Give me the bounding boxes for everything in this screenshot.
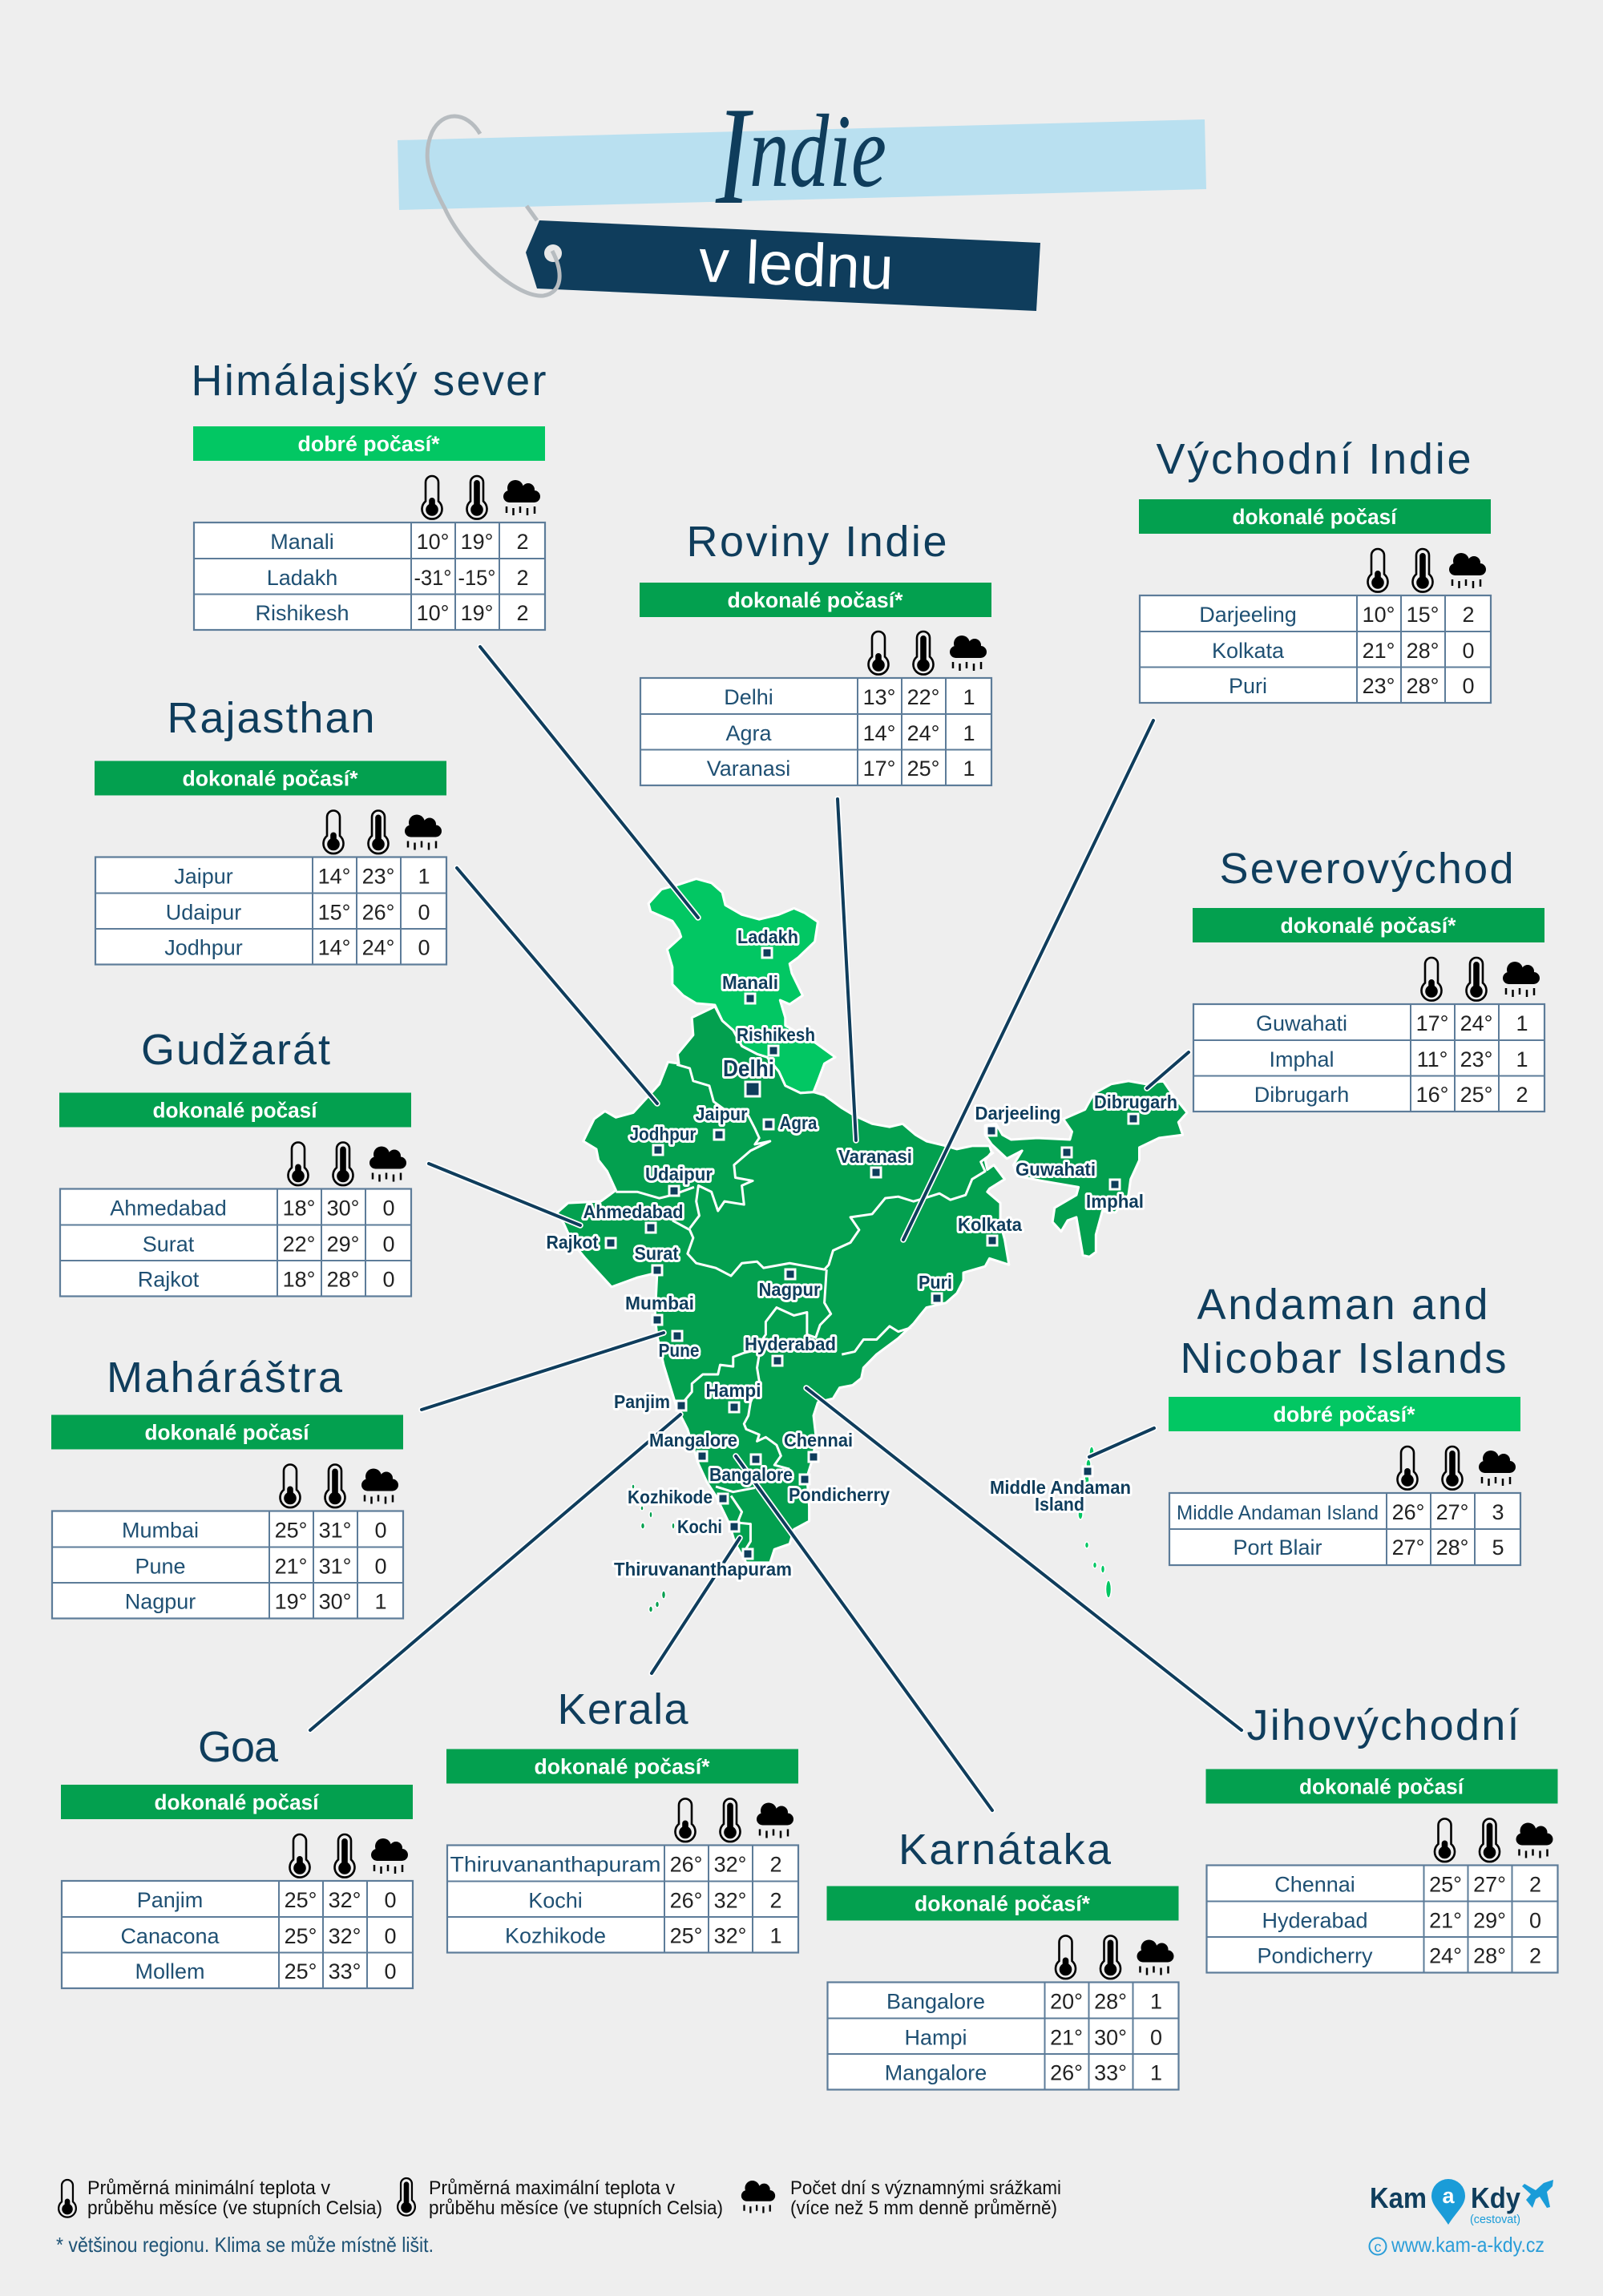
city labels	[547, 926, 1177, 1580]
data table: 5	[1492, 1535, 1504, 1560]
data table: Pune	[135, 1555, 186, 1579]
logo subline: (cestovat)	[1470, 2213, 1520, 2226]
region: Himalayan north	[648, 879, 835, 1093]
data table: 28°	[1436, 1535, 1468, 1560]
legend: minimum temperature: Průměrná minimální teplota v	[87, 2177, 330, 2199]
luggage tag	[526, 220, 1040, 311]
legend: maximum temperature: průběhu měsíce (ve stupních Celsia)	[429, 2197, 723, 2219]
weather rating bar	[193, 426, 545, 461]
line: Eastern India	[903, 720, 1153, 1240]
data table: Jaipur	[174, 864, 233, 888]
label: Kozhikode: Kozhikode	[628, 1487, 713, 1507]
data table: 2	[1516, 1083, 1528, 1107]
label: Ahmedabad: Ahmedabad	[583, 1201, 683, 1222]
weather rating bar	[1193, 908, 1544, 942]
tag string	[427, 116, 559, 296]
legend: rainy days	[741, 2177, 1061, 2219]
data table: 0	[1529, 1909, 1541, 1933]
heading: Maháráštra	[107, 1354, 343, 1402]
label: Guwahati: Guwahati	[1016, 1159, 1096, 1180]
data table: 25°	[285, 1959, 317, 1983]
icons	[1435, 1819, 1553, 1862]
weather rating bar: dokonalé počasí	[144, 1420, 310, 1444]
label: Manali: Manali	[722, 972, 778, 993]
icons	[1056, 1936, 1173, 1979]
region: main India	[557, 1007, 1009, 1563]
title text Indie: I	[715, 78, 754, 233]
data table	[1193, 1004, 1544, 1112]
label: Rajkot: Rajkot	[547, 1232, 599, 1253]
line: Southeast	[806, 1388, 1242, 1730]
label: Puri: Puri	[919, 1272, 952, 1293]
copyright and website: c	[1374, 2239, 1382, 2255]
data table: 28°	[1407, 674, 1439, 698]
data table: Panjim	[137, 1888, 203, 1912]
data table: 2	[769, 1853, 782, 1877]
region shapes	[557, 879, 1187, 1563]
panel: Eastern India	[1139, 435, 1491, 703]
data table: 2	[1462, 603, 1475, 627]
weather rating bar: dokonalé počasí*	[728, 588, 903, 612]
tag hole	[544, 244, 562, 262]
data table: 23°	[362, 864, 394, 888]
data table: 0	[382, 1196, 395, 1220]
data table: Mangalore	[885, 2061, 987, 2085]
data table: 19°	[461, 530, 493, 554]
data table: Manali	[270, 530, 334, 554]
label: Panjim: Panjim	[614, 1391, 670, 1412]
data table: Canacona	[120, 1924, 220, 1948]
line: Goa	[310, 1414, 680, 1730]
data table: 26°	[1050, 2061, 1083, 2085]
data table: Kozhikode	[505, 1923, 606, 1947]
data table: 1	[1150, 1989, 1162, 2013]
Andaman and Nicobar islands	[1078, 1447, 1111, 1598]
line: Northeast	[1147, 1052, 1189, 1088]
data table: 24°	[907, 721, 939, 745]
data table: 26°	[362, 901, 394, 925]
data table: 2	[516, 601, 529, 625]
data table: 10°	[417, 530, 449, 554]
data table: 24°	[1429, 1944, 1462, 1968]
data table: 19°	[275, 1590, 307, 1614]
data table: 25°	[1429, 1872, 1462, 1896]
data table	[640, 678, 991, 785]
data table: Nagpur	[125, 1590, 196, 1614]
data table: 2	[516, 530, 529, 554]
icon: map pin	[1431, 2179, 1465, 2225]
data table: 32°	[714, 1853, 746, 1877]
label: Mumbai: Mumbai	[625, 1293, 694, 1313]
label: Kochi: Kochi	[677, 1516, 722, 1537]
data table: Udaipur	[166, 901, 241, 925]
weather rating bar: dokonalé počasí*	[534, 1755, 710, 1779]
label: Rishikesh: Rishikesh	[737, 1024, 815, 1045]
data table: -15°	[458, 566, 495, 590]
data table: 18°	[283, 1196, 315, 1220]
data table: 26°	[670, 1888, 702, 1912]
legend: maximum temperature: Průměrná maximální teplota v	[429, 2177, 675, 2199]
label: Dibrugarh: Dibrugarh	[1094, 1092, 1177, 1112]
label: Delhi: Delhi	[723, 1056, 774, 1082]
line: Andaman	[1089, 1428, 1154, 1457]
data table	[1140, 595, 1491, 703]
legend: rainy days: (více než 5 mm denně průměrně)	[790, 2197, 1057, 2219]
heading: Rajasthan	[167, 694, 375, 742]
data table: 24°	[362, 936, 394, 960]
data table: 1	[1516, 1047, 1528, 1071]
data table: Rajkot	[138, 1268, 200, 1292]
data table: Middle Andaman Island	[1177, 1502, 1379, 1524]
data table: 25°	[285, 1924, 317, 1948]
data table: Surat	[143, 1233, 195, 1257]
line: Maharashtra	[422, 1333, 664, 1410]
icon: map pin: a	[1442, 2184, 1455, 2208]
icons	[290, 1834, 408, 1878]
weather rating bar	[446, 1749, 798, 1784]
logo: Kam a Kdy	[1369, 2179, 1553, 2257]
map of India	[557, 879, 1187, 1612]
data table: 27°	[1436, 1500, 1468, 1524]
data table: 0	[374, 1518, 387, 1542]
label: Pune: Pune	[659, 1340, 699, 1361]
label: Island: Island	[1035, 1494, 1084, 1515]
data table: Hampi	[904, 2026, 967, 2050]
subtitle v lednu: v lednu	[697, 227, 895, 303]
weather rating bar: dokonalé počasí	[152, 1098, 318, 1122]
data table: 23°	[1460, 1047, 1492, 1071]
data table: 30°	[319, 1590, 351, 1614]
data table: Kochi	[528, 1888, 583, 1912]
data table: 2	[769, 1888, 782, 1912]
data table: 30°	[1094, 2026, 1127, 2050]
data table: Dibrugarh	[1254, 1083, 1349, 1107]
weather rating bar	[827, 1886, 1178, 1920]
data table: 32°	[329, 1924, 361, 1948]
leader lines	[310, 647, 1242, 1810]
data table: 14°	[863, 721, 895, 745]
data table: Ahmedabad	[110, 1196, 227, 1220]
weather rating bar: dokonalé počasí	[1233, 505, 1398, 529]
label: Bangalore: Bangalore	[709, 1464, 793, 1485]
icons	[289, 1143, 406, 1185]
label: Hampi: Hampi	[705, 1380, 761, 1401]
region: Northeast	[985, 1081, 1187, 1257]
data table: 0	[418, 936, 430, 960]
legend: rainy days: Počet dní s významnými srážkami	[790, 2177, 1061, 2199]
data table: 1	[374, 1590, 387, 1614]
line: Gujarat	[429, 1164, 580, 1225]
data table: 17°	[863, 757, 895, 781]
logo word Kdy: Kdy	[1471, 2181, 1520, 2214]
label: Mangalore: Mangalore	[649, 1430, 737, 1451]
data table: 21°	[1363, 639, 1395, 663]
icons	[675, 1798, 793, 1842]
data table: 29°	[327, 1233, 359, 1257]
data table: 28°	[1407, 639, 1439, 663]
Lakshadweep islands	[632, 1484, 675, 1612]
icons	[1398, 1447, 1516, 1490]
title text Indie	[715, 78, 886, 233]
data table: Ladakh	[267, 566, 337, 590]
weather rating bar	[59, 1093, 411, 1127]
data table: 23°	[1363, 674, 1395, 698]
heading: Himálajský sever	[191, 357, 547, 405]
data table: 1	[963, 721, 975, 745]
data table	[62, 1881, 413, 1988]
data table: Mollem	[135, 1959, 205, 1983]
heading: Nicobar Islands	[1180, 1334, 1507, 1382]
data table: 15°	[318, 901, 350, 925]
data table: 0	[1462, 674, 1475, 698]
label: Varanasi: Varanasi	[838, 1146, 912, 1167]
data table: 32°	[714, 1888, 746, 1912]
line: Roviny Indie	[838, 799, 856, 1140]
title text Indie: ndie	[749, 94, 886, 209]
legend: minimum temperature	[59, 2177, 382, 2219]
weather rating bar	[640, 583, 991, 617]
data table: 0	[384, 1924, 397, 1948]
data table: 33°	[329, 1959, 361, 1983]
legend: minimum temperature: průběhu měsíce (ve stupních Celsia)	[87, 2197, 382, 2219]
heading: Kerala	[558, 1685, 688, 1733]
data table	[60, 1189, 411, 1297]
data table: 1	[769, 1923, 782, 1947]
icons	[869, 632, 987, 675]
data table: 27°	[1473, 1872, 1506, 1896]
data table: 13°	[863, 685, 895, 709]
icons	[324, 811, 442, 853]
legend	[56, 2177, 1061, 2257]
data table: 14°	[318, 936, 350, 960]
data table: 0	[382, 1233, 395, 1257]
data table: 25°	[285, 1888, 317, 1912]
data table: 22°	[907, 685, 939, 709]
legend: maximum temperature	[398, 2177, 723, 2219]
data table	[447, 1845, 798, 1952]
city markers	[606, 948, 1138, 1559]
icon: airplane	[1522, 2180, 1553, 2208]
data table: Thiruvananthapuram	[450, 1853, 660, 1877]
data table: 21°	[1429, 1909, 1462, 1933]
data table: 2	[1529, 1944, 1541, 1968]
panel: Gujarat	[59, 1026, 411, 1297]
label: Thiruvananthapuram: Thiruvananthapuram	[614, 1559, 792, 1580]
footnote: * většinou regionu. Klima se může místně lišit.	[56, 2233, 434, 2257]
label: Darjeeling: Darjeeling	[975, 1103, 1061, 1124]
weather rating bar: dokonalé počasí*	[183, 766, 358, 790]
data table: Port Blair	[1233, 1535, 1322, 1560]
weather rating bar	[61, 1785, 413, 1819]
weather rating bar: dokonalé počasí	[1299, 1774, 1464, 1798]
data table: 28°	[1094, 1989, 1127, 2013]
line: Karnataka	[736, 1456, 992, 1810]
data table: 0	[384, 1959, 397, 1983]
data table: Kolkata	[1212, 639, 1285, 663]
heading: Roviny Indie	[686, 518, 947, 566]
logo word Kam: Kam	[1370, 2181, 1427, 2214]
panel: Maharashtra	[51, 1354, 403, 1619]
label: Chennai: Chennai	[784, 1430, 853, 1451]
label: Jodhpur: Jodhpur	[630, 1124, 697, 1144]
data table: 0	[418, 901, 430, 925]
data table: Delhi	[724, 685, 773, 709]
data table: Mumbai	[122, 1518, 199, 1542]
data table: Rishikesh	[255, 601, 349, 625]
heading: Východní Indie	[1156, 435, 1472, 483]
icons	[1422, 958, 1540, 1001]
data table: Agra	[725, 721, 772, 745]
label: Kolkata: Kolkata	[958, 1214, 1022, 1235]
weather rating bar: dokonalé počasí	[154, 1790, 320, 1814]
weather rating bar	[1205, 1769, 1558, 1803]
data table: 2	[516, 566, 529, 590]
panel: Goa	[61, 1723, 413, 1988]
label: Imphal: Imphal	[1086, 1191, 1144, 1212]
data table	[52, 1511, 403, 1619]
data table: -31°	[414, 566, 452, 590]
label: Udaipur: Udaipur	[645, 1164, 713, 1184]
data table	[1169, 1493, 1520, 1565]
weather rating bar	[1139, 499, 1491, 534]
data table: 21°	[1050, 2026, 1083, 2050]
data table: 22°	[283, 1233, 315, 1257]
data table: 1	[1516, 1011, 1528, 1035]
data table	[1207, 1866, 1558, 1973]
panel: Northeast	[1193, 845, 1544, 1112]
panel: Rajasthan	[95, 694, 446, 965]
label: Hyderabad: Hyderabad	[745, 1334, 836, 1354]
data table: 0	[1462, 639, 1475, 663]
data table: Varanasi	[707, 757, 790, 781]
heading: Andaman and	[1197, 1281, 1488, 1329]
copyright and website: www.kam-a-kdy.cz	[1391, 2233, 1544, 2257]
label: Agra: Agra	[779, 1112, 818, 1133]
data table: 25°	[670, 1923, 702, 1947]
weather rating bar	[95, 761, 446, 795]
weather rating bar	[1169, 1397, 1520, 1431]
title: Indie v lednu	[398, 78, 1206, 311]
data table: Darjeeling	[1199, 603, 1297, 627]
data table: 24°	[1460, 1011, 1492, 1035]
panel: Andaman and Nicobar Islands	[1169, 1281, 1520, 1565]
label: Ladakh: Ladakh	[737, 926, 798, 947]
panel: Roviny Indie	[640, 518, 991, 785]
data table: 1	[963, 685, 975, 709]
data table: 25°	[907, 757, 939, 781]
data table: Chennai	[1274, 1872, 1355, 1896]
icons	[281, 1465, 398, 1507]
data table: 26°	[1392, 1500, 1424, 1524]
data table: 0	[384, 1888, 397, 1912]
data table: 33°	[1094, 2061, 1127, 2085]
data table: 20°	[1050, 1989, 1083, 2013]
data table: Imphal	[1269, 1047, 1334, 1071]
data table: 21°	[275, 1555, 307, 1579]
data table: 14°	[318, 864, 350, 888]
data table: 31°	[319, 1555, 351, 1579]
heading: Severovýchod	[1220, 845, 1513, 893]
islands	[632, 1447, 1111, 1612]
weather rating bar: dokonalé počasí*	[1281, 914, 1456, 938]
data table: Pondicherry	[1257, 1944, 1373, 1968]
data table: 26°	[670, 1853, 702, 1877]
data table: 19°	[461, 601, 493, 625]
data table: 1	[1150, 2061, 1162, 2085]
icons	[422, 476, 540, 519]
data table	[194, 523, 545, 630]
data table: 2	[1529, 1872, 1541, 1896]
data table: 25°	[275, 1518, 307, 1542]
weather rating bar: dobré počasí*	[298, 432, 440, 456]
label: Nagpur: Nagpur	[758, 1279, 821, 1300]
data table: 3	[1492, 1500, 1504, 1524]
data table: 0	[382, 1268, 395, 1292]
heading: Karnátaka	[898, 1826, 1112, 1874]
data table: 32°	[714, 1923, 746, 1947]
panel: Southeast	[1205, 1701, 1558, 1973]
data table: 31°	[319, 1518, 351, 1542]
data table: Jodhpur	[164, 936, 243, 960]
data table: 28°	[1473, 1944, 1506, 1968]
label: Middle Andaman Island: Middle Andaman	[990, 1477, 1131, 1498]
data table: 16°	[1416, 1083, 1448, 1107]
data table: 25°	[1460, 1083, 1492, 1107]
weather rating bar: dokonalé počasí*	[915, 1891, 1090, 1915]
data table	[827, 1983, 1178, 2090]
heading: Goa	[198, 1723, 279, 1771]
line: Kerala	[652, 1538, 740, 1673]
label: Pondicherry: Pondicherry	[789, 1484, 890, 1505]
data table: Puri	[1229, 674, 1267, 698]
data table: 28°	[327, 1268, 359, 1292]
data table: 18°	[283, 1268, 315, 1292]
light blue title band	[398, 119, 1206, 210]
data table: 17°	[1416, 1011, 1448, 1035]
label: Jaipur: Jaipur	[696, 1104, 748, 1124]
label: Surat: Surat	[635, 1243, 679, 1264]
line: Rajasthan	[457, 868, 657, 1104]
data table: Bangalore	[886, 1989, 985, 2013]
panel: Karnataka	[827, 1826, 1178, 2090]
data table: 10°	[1363, 603, 1395, 627]
data table: 0	[1150, 2026, 1162, 2050]
data table: 27°	[1392, 1535, 1424, 1560]
data table: Guwahati	[1256, 1011, 1347, 1035]
data table: 1	[418, 864, 430, 888]
data table: 32°	[329, 1888, 361, 1912]
data table: 15°	[1407, 603, 1439, 627]
data table: 10°	[417, 601, 449, 625]
heading: Gudžarát	[141, 1026, 330, 1074]
panel: Himalayan north	[191, 357, 547, 630]
heading	[1180, 1281, 1507, 1382]
weather rating bar: dobré počasí*	[1273, 1402, 1415, 1426]
line: Himalayan north	[480, 647, 698, 918]
panel: Kerala	[446, 1685, 798, 1952]
data table: Hyderabad	[1262, 1909, 1368, 1933]
data table: 1	[963, 757, 975, 781]
data table: 30°	[327, 1196, 359, 1220]
data table: 29°	[1473, 1909, 1506, 1933]
data table: 11°	[1417, 1047, 1448, 1071]
data table: 0	[374, 1555, 387, 1579]
icons	[1367, 549, 1486, 592]
data table	[95, 857, 446, 965]
weather rating bar	[51, 1415, 403, 1449]
heading: Jihovýchodní	[1247, 1701, 1520, 1749]
